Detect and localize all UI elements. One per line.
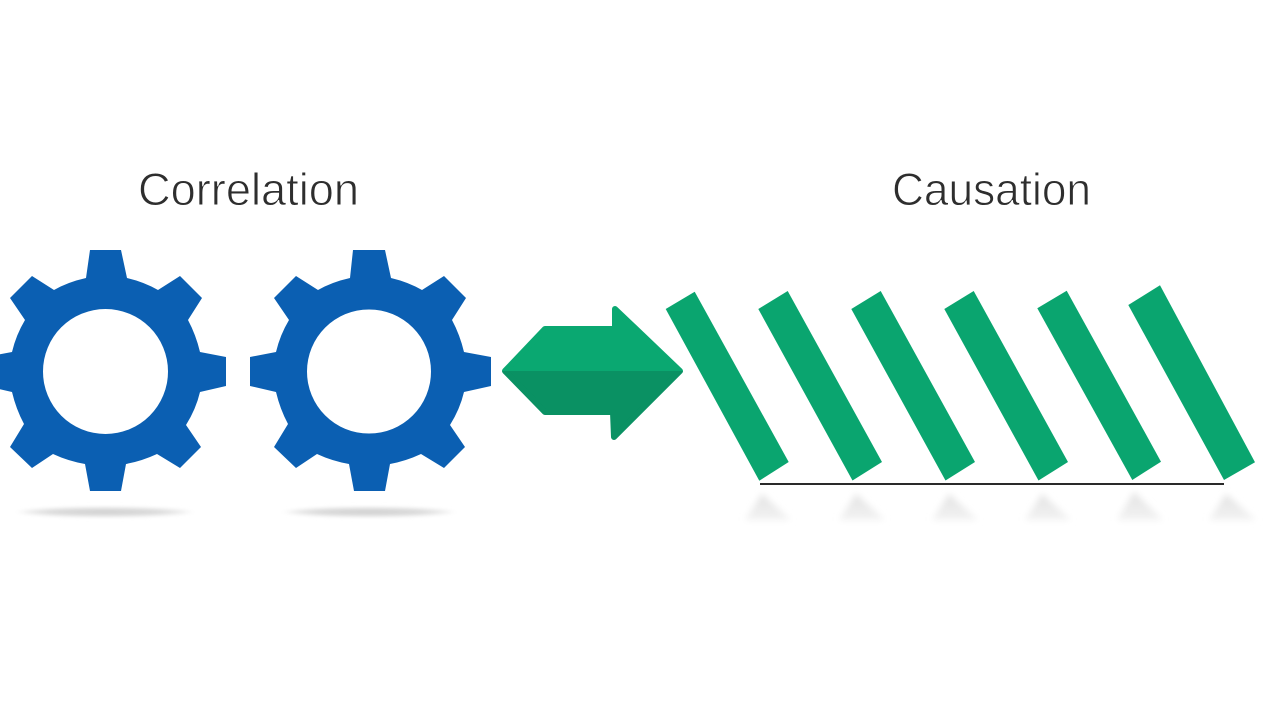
- icon: left gear: [0, 250, 226, 491]
- shadow 3: [932, 494, 978, 520]
- shadow 4: [1025, 494, 1071, 520]
- domino 1: [666, 292, 789, 481]
- arrow upper half: [502, 306, 683, 371]
- dominoes: [666, 285, 1255, 481]
- heading: Causation: Causation: [892, 164, 1091, 215]
- arrow: [505, 309, 680, 437]
- domino 3: [851, 291, 975, 480]
- domino 4: [944, 291, 1068, 480]
- domino 2: [758, 291, 882, 480]
- gear shadow: left: [21, 507, 189, 517]
- gear shadow: right: [287, 507, 451, 517]
- shadow 1: [745, 494, 791, 520]
- baseline: [760, 483, 1224, 485]
- shadow 6: [1209, 494, 1256, 520]
- shadow 5: [1117, 492, 1163, 520]
- arrow lower half: [502, 371, 683, 440]
- shadow 2: [839, 494, 885, 520]
- domino 5: [1037, 291, 1161, 480]
- domino 6: [1128, 285, 1255, 480]
- icon: right gear: [250, 250, 491, 491]
- heading: Correlation: Correlation: [138, 164, 359, 215]
- domino shadows: [745, 492, 1256, 520]
